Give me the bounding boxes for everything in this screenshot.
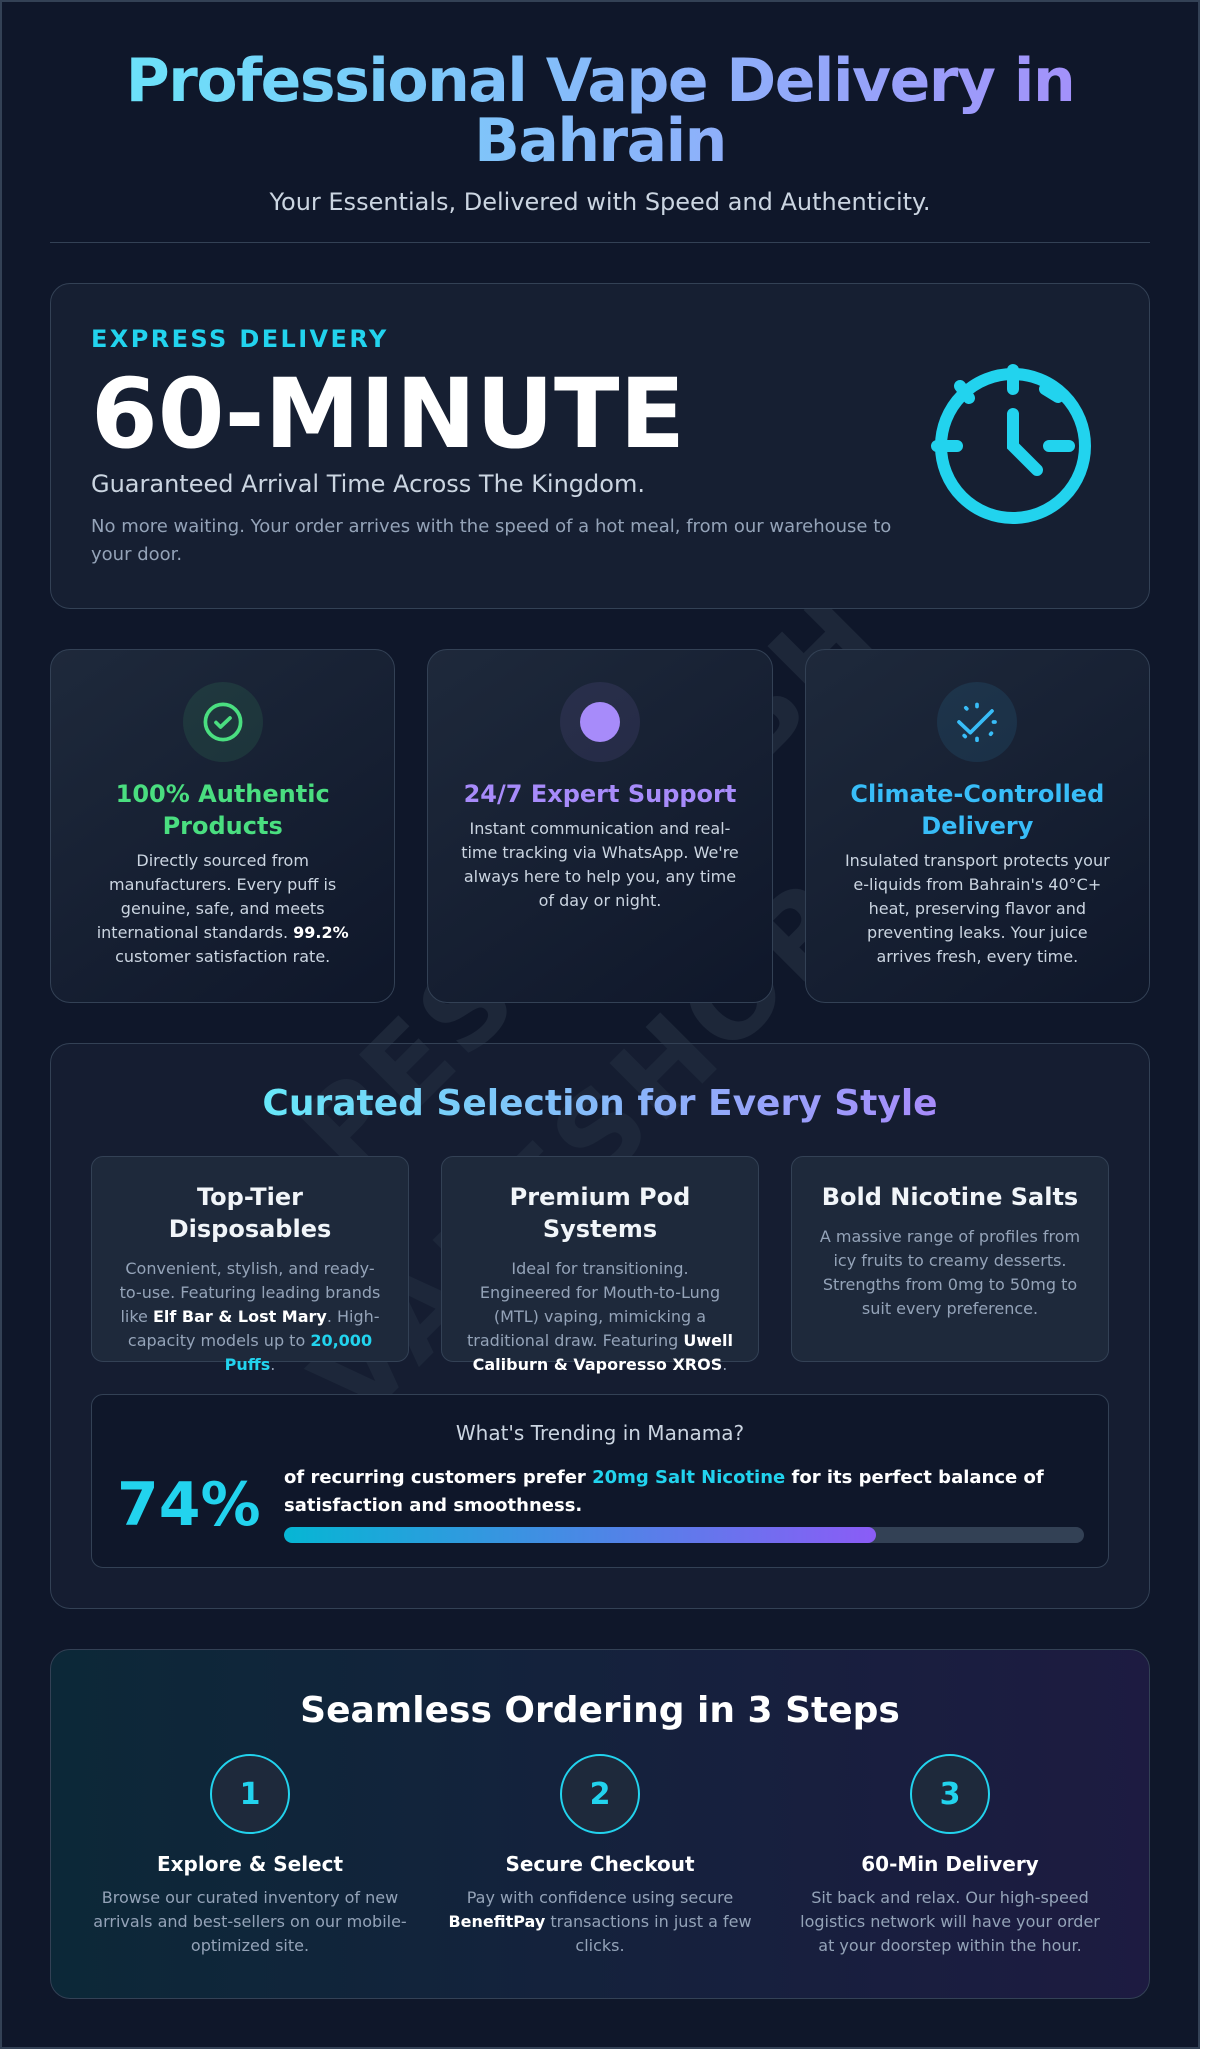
step text: at your doorstep within the hour. xyxy=(818,1936,1082,1955)
step text xyxy=(448,1888,752,1955)
card heading: Bold Nicotine Salts xyxy=(822,1183,1078,1211)
heading: 100% Authentic xyxy=(116,780,330,808)
text: time tracking via WhatsApp. We're xyxy=(461,843,739,862)
heading: Climate-Controlled xyxy=(850,780,1104,808)
step text xyxy=(800,1888,1100,1955)
icon: sparkle check xyxy=(937,682,1017,762)
step text: BenefitPay transactions in just a few xyxy=(448,1912,752,1931)
heading: 24/7 Expert Support xyxy=(464,780,736,808)
title: Professional Vape Delivery in xyxy=(126,46,1074,116)
card text: Convenient, stylish, and ready- xyxy=(125,1259,375,1278)
text: customer satisfaction rate. xyxy=(115,947,330,966)
card heading: Disposables xyxy=(169,1215,331,1243)
step text: Pay with confidence using secure xyxy=(467,1888,733,1907)
panel: express delivery hero xyxy=(50,283,1150,609)
text: international standards. 99.2% xyxy=(97,923,349,942)
heading xyxy=(116,780,330,840)
hero description: your door. xyxy=(91,544,182,565)
text: manufacturers. Every puff is xyxy=(109,875,336,894)
card heading: Premium Pod xyxy=(510,1183,690,1211)
step 3 xyxy=(800,1754,1100,1955)
text: Insulated transport protects your xyxy=(845,851,1110,870)
icon: clock xyxy=(931,364,1091,524)
number badge: 2 xyxy=(590,1777,610,1812)
heading: Products xyxy=(163,812,283,840)
card: disposables xyxy=(91,1156,409,1362)
card text: Engineered for Mouth-to-Lung xyxy=(480,1283,720,1302)
heading: Delivery xyxy=(921,812,1033,840)
card text: traditional draw. Featuring Uwell xyxy=(467,1331,733,1350)
card: nicotine salts xyxy=(791,1156,1109,1362)
step 2 xyxy=(448,1754,752,1955)
text: arrives fresh, every time. xyxy=(876,947,1078,966)
progress bar xyxy=(284,1527,1084,1543)
card text xyxy=(820,1227,1080,1318)
icon: solid dot xyxy=(560,682,640,762)
card heading xyxy=(169,1183,331,1243)
step text: clicks. xyxy=(575,1936,625,1955)
text: genuine, safe, and meets xyxy=(121,899,325,918)
hero description xyxy=(91,516,891,565)
heading: Seamless Ordering in 3 Steps xyxy=(300,1690,900,1731)
text: Instant communication and real- xyxy=(470,819,730,838)
title xyxy=(50,51,1150,171)
text: always here to help you, any time xyxy=(464,867,736,886)
step heading: Explore & Select xyxy=(157,1852,343,1876)
watermark: VAPESHOP BH xyxy=(288,694,1038,1444)
number badge xyxy=(910,1754,990,1834)
step text: arrivals and best-sellers on our mobile- xyxy=(93,1912,407,1931)
step heading: Secure Checkout xyxy=(505,1852,695,1876)
card: pod systems xyxy=(441,1156,759,1362)
text xyxy=(845,851,1110,966)
text: of day or night. xyxy=(539,891,661,910)
hero eyebrow: EXPRESS DELIVERY xyxy=(91,325,389,353)
card text: suit every preference. xyxy=(862,1299,1038,1318)
number badge: 3 xyxy=(940,1777,960,1812)
text xyxy=(461,819,739,910)
card heading: Top-Tier xyxy=(197,1183,303,1211)
card text: (MTL) vaping, mimicking a xyxy=(494,1307,706,1326)
card heading: Systems xyxy=(543,1215,657,1243)
text: e-liquids from Bahrain's 40°C+ xyxy=(853,875,1101,894)
step text: optimized site. xyxy=(191,1936,309,1955)
step text: Sit back and relax. Our high-speed xyxy=(811,1888,1089,1907)
stat text xyxy=(284,1467,1044,1516)
card text: to-use. Featuring leading brands xyxy=(120,1283,380,1302)
card text: Puffs. xyxy=(225,1355,275,1374)
panel: curated selection xyxy=(50,1043,1150,1609)
hero description: No more waiting. Your order arrives with the speed of a hot meal, from our warehouse to xyxy=(91,516,891,537)
text: Directly sourced from xyxy=(136,851,309,870)
heading xyxy=(850,780,1104,840)
panel: expert support xyxy=(427,649,773,1003)
trending box xyxy=(91,1394,1109,1568)
stat: 74%: 74% xyxy=(117,1470,261,1540)
panel: climate controlled xyxy=(805,649,1150,1003)
stat text: satisfaction and smoothness. xyxy=(284,1495,582,1516)
hero headline: 60-MINUTE xyxy=(91,358,685,470)
watermark: PESHOP BH xyxy=(276,569,904,1197)
trending heading: What's Trending in Manama? xyxy=(456,1421,744,1445)
card text xyxy=(467,1259,733,1374)
text xyxy=(97,851,349,966)
panel: authentic products xyxy=(50,649,395,1003)
text: preventing leaks. Your juice xyxy=(867,923,1088,942)
stat text: of recurring customers prefer 20mg Salt Nicotine for its perfect balance of xyxy=(284,1467,1044,1488)
card text: Strengths from 0mg to 50mg to xyxy=(823,1275,1077,1294)
number badge xyxy=(560,1754,640,1834)
step 1 xyxy=(93,1754,407,1955)
progress fill 74% xyxy=(284,1527,876,1543)
step heading: 60-Min Delivery xyxy=(861,1852,1039,1876)
title: Bahrain xyxy=(474,106,726,176)
step text: Browse our curated inventory of new xyxy=(102,1888,398,1907)
card text: icy fruits to creamy desserts. xyxy=(833,1251,1067,1270)
heading: Curated Selection for Every Style xyxy=(262,1083,938,1124)
card text: capacity models up to 20,000 xyxy=(128,1331,372,1350)
card text: like Elf Bar & Lost Mary. High- xyxy=(120,1307,380,1326)
icon: check circle xyxy=(183,682,263,762)
subtitle: Your Essentials, Delivered with Speed and Authenticity. xyxy=(270,188,930,216)
card text: Caliburn & Vaporesso XROS. xyxy=(473,1355,727,1374)
number badge xyxy=(210,1754,290,1834)
number badge: 1 xyxy=(240,1777,260,1812)
hero subheading: Guaranteed Arrival Time Across The Kingdom. xyxy=(91,470,645,498)
text: heat, preserving flavor and xyxy=(869,899,1086,918)
card heading xyxy=(510,1183,690,1243)
step text xyxy=(93,1888,407,1955)
step text: logistics network will have your order xyxy=(800,1912,1100,1931)
card text xyxy=(120,1259,380,1374)
card text: A massive range of profiles from xyxy=(820,1227,1080,1246)
panel: ordering steps xyxy=(50,1649,1150,1999)
card text: Ideal for transitioning. xyxy=(511,1259,689,1278)
